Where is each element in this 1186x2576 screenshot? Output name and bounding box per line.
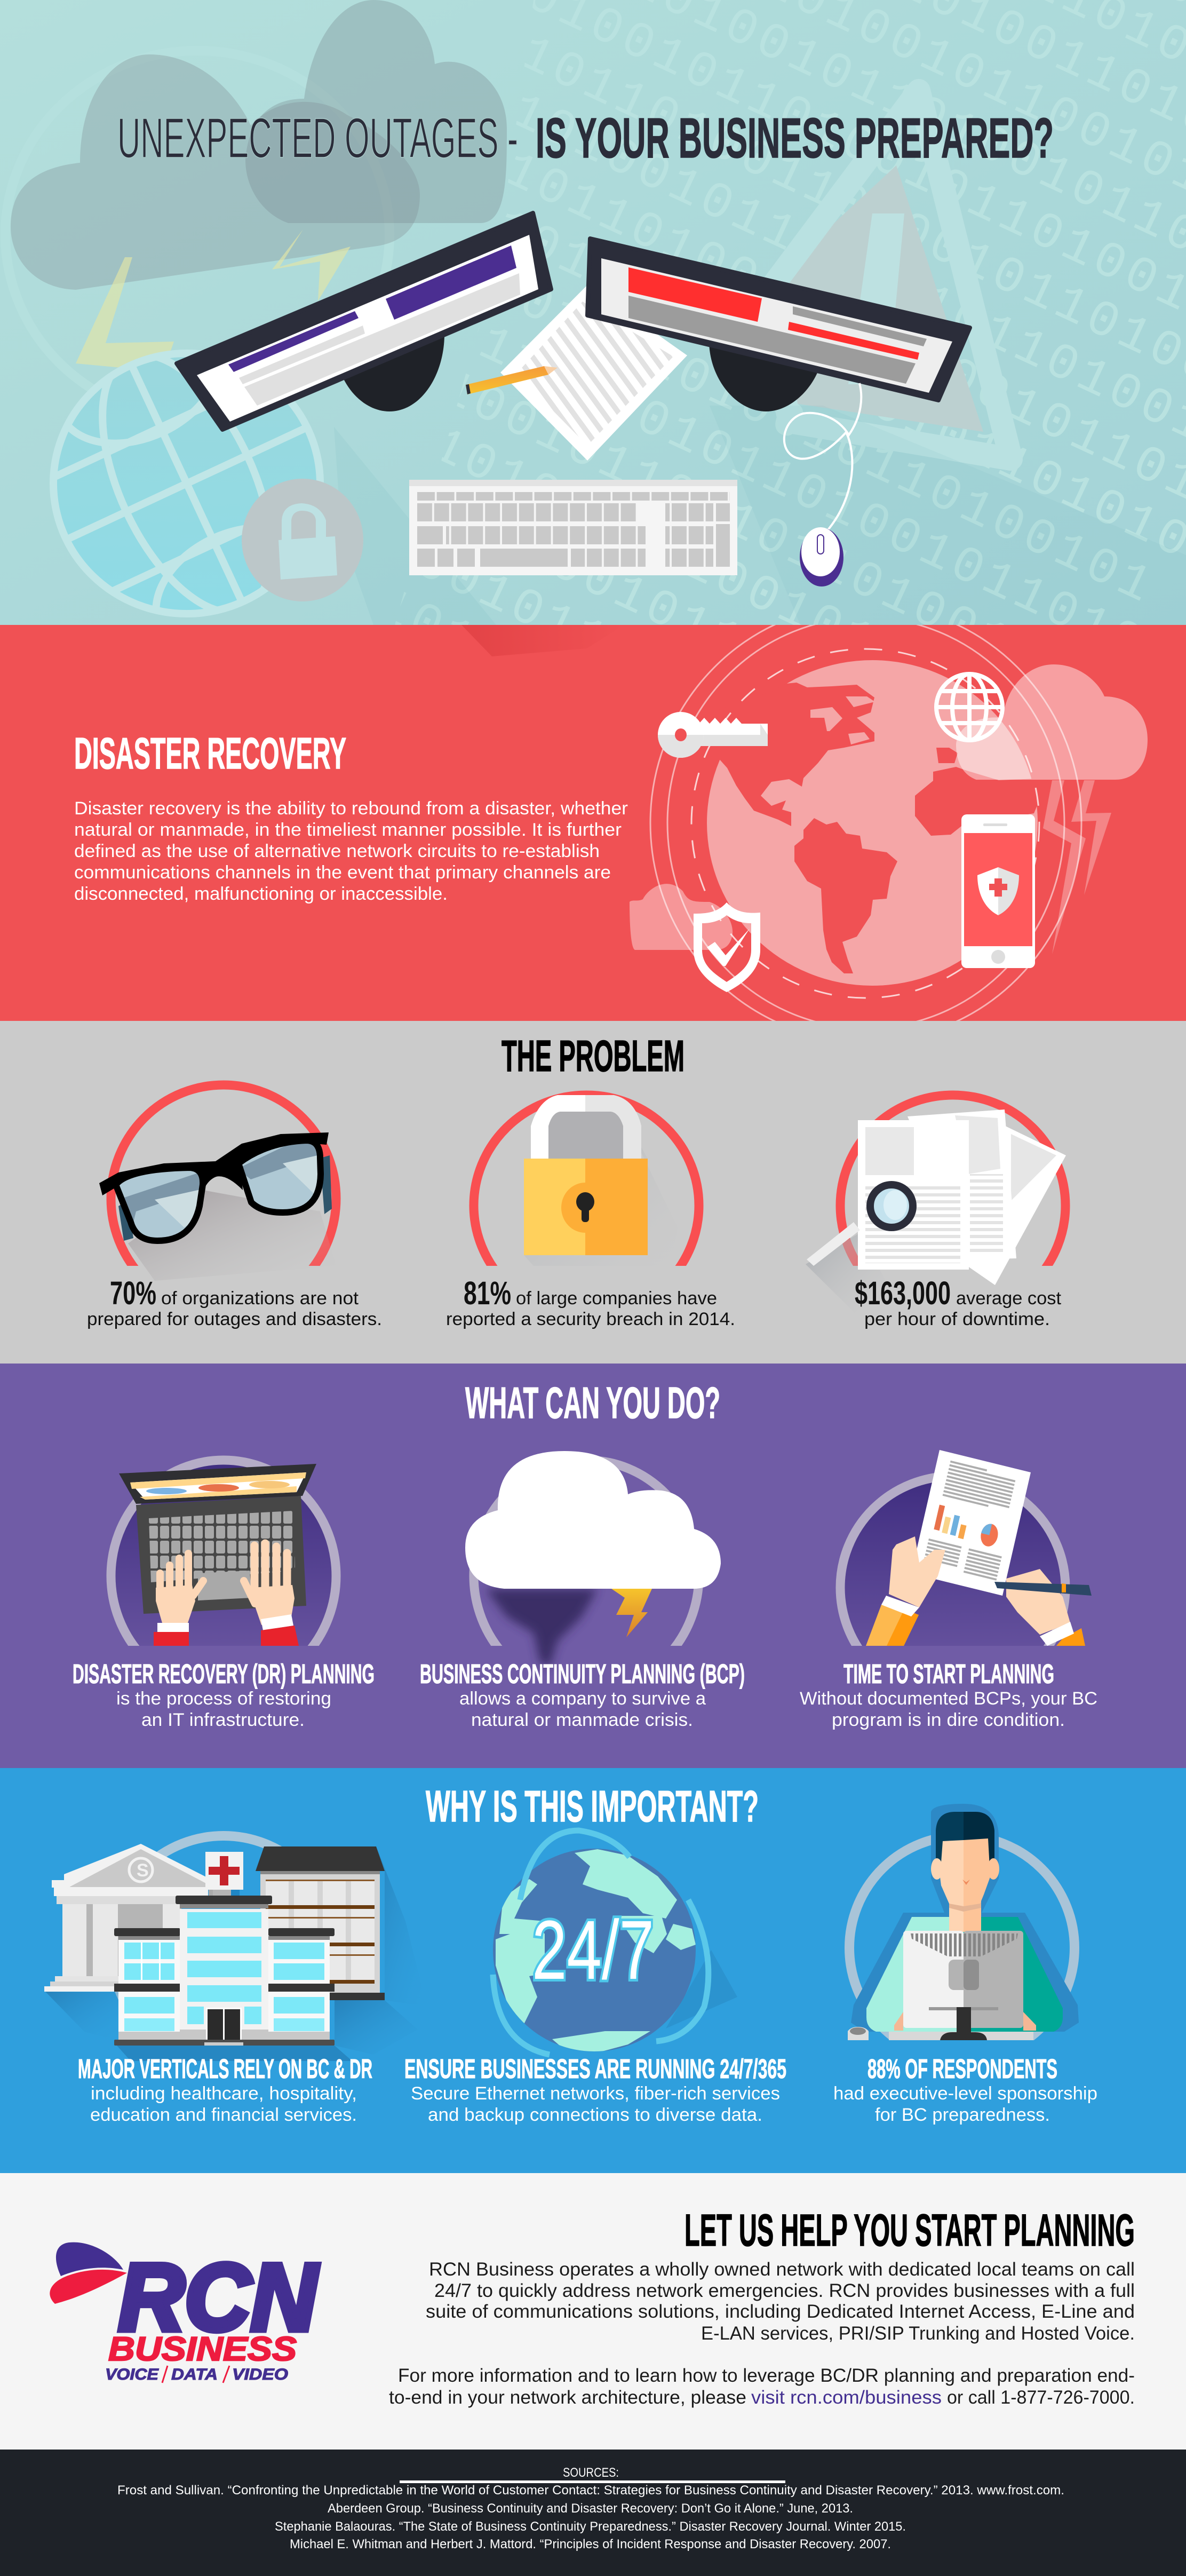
hair — [936, 1812, 964, 1861]
planning document illustration — [840, 1476, 1085, 1699]
item: major verticals: education and financial services. — [90, 2105, 357, 2125]
item: DR planning: an IT infrastructure. — [141, 1710, 305, 1730]
stat: $163,000 — [855, 1275, 1062, 1329]
logo: RCN Business — [50, 2242, 319, 2383]
shield check icon — [694, 902, 760, 992]
hands and pen — [881, 1536, 1092, 1646]
smartphone icon — [961, 814, 1035, 968]
item: time to start — [800, 1659, 1097, 1730]
panel: sources — [0, 2450, 1186, 2576]
company paragraph: 24/7 to quickly address network emergencies. RCN provides businesses with a full — [434, 2280, 1135, 2301]
report page — [911, 1450, 1031, 1596]
stat: $163,000: average cost — [956, 1288, 1062, 1309]
mouse — [800, 527, 843, 586]
logo: RCN Business: RCN — [118, 2244, 319, 2350]
lightning pale — [1043, 780, 1111, 954]
item: BC planning: allows a company to survive a — [459, 1689, 706, 1709]
apartment building — [256, 1846, 385, 2000]
title — [120, 117, 1052, 158]
binary digit background: 1001101001011010010110100101 — [259, 155, 1164, 617]
face — [940, 1840, 964, 1906]
stat: 81% — [446, 1275, 735, 1329]
binary digit background: 0100101101001101001010110100 — [202, 314, 1107, 776]
binary digit background: 1010110100101100101101001101 — [211, 256, 1116, 719]
binary digit background: 0110010110100101101001011010 — [250, 212, 1154, 675]
shirt — [866, 1917, 964, 2032]
body text: Disaster recovery is the ability to rebound from a disaster, whether — [74, 798, 628, 819]
source list: Aberdeen Group. “Business Continuity and Disaster Recovery: Don’t Go it Alone.” June, 2013. — [328, 2501, 853, 2516]
item: ensure businesses — [404, 2054, 786, 2125]
monitor back — [903, 1931, 964, 2028]
24/7 label: 24/7 — [532, 1904, 654, 1997]
shadow at panel top — [461, 625, 624, 656]
ring behind globe — [5, 51, 389, 419]
heading: WHAT CAN YOU DO? — [465, 1378, 720, 1428]
target ring for glasses — [111, 1085, 336, 1312]
logo: RCN Business: VIDEO — [232, 2366, 288, 2383]
right hand — [244, 1543, 294, 1625]
source list: Frost and Sullivan. “Confronting the Unpredictable in the World of Customer Contact: Strategies for Business Continuity and Disaster Recovery.” 2013. www.frost.com. — [117, 2483, 1064, 2498]
logo: RCN Business: BUSINESS — [108, 2331, 297, 2368]
stat: 70%: 70% — [110, 1275, 156, 1311]
item: BC planning: BUSINESS CONTINUITY PLANNING (BCP) — [420, 1659, 745, 1689]
title: UNEXPECTED OUTAGES - — [117, 107, 518, 170]
panel: hero — [0, 0, 1186, 625]
stat: 81%: of large companies have — [516, 1288, 717, 1309]
binary digit background: 1011010010110010110100101001 — [117, 459, 1021, 922]
white cloud — [465, 1451, 721, 1589]
padlock illustration — [474, 1095, 699, 1316]
world map globe — [650, 604, 1081, 1042]
target ring for documents — [840, 1095, 1065, 1316]
monitor stand left — [344, 337, 444, 411]
panel: what can you do — [0, 1364, 1186, 1768]
stat: 81%: reported a security breach in 2014. — [446, 1309, 735, 1329]
logo: RCN Business: DATA — [171, 2366, 218, 2383]
heading: THE PROBLEM — [502, 1031, 684, 1081]
item: ensure businesses: ENSURE BUSINESSES ARE RUNNING 24/7/365 — [404, 2054, 786, 2084]
bank: S — [137, 1860, 149, 1881]
cloud right — [956, 664, 1148, 780]
item: 88% of respondents — [833, 2054, 1097, 2125]
hands — [894, 2012, 903, 2031]
panel: disaster recovery — [0, 604, 1186, 1042]
glasses illustration — [99, 1132, 336, 1281]
item: 88% of respondents: had executive-level sponsorship — [833, 2083, 1097, 2104]
keyboard — [409, 480, 737, 575]
person at monitor illustration — [848, 1804, 1079, 2060]
item: DR planning — [73, 1659, 375, 1730]
buildings illustration — [44, 1836, 427, 2061]
item: major verticals: MAJOR VERTICALS RELY ON BC & DR — [78, 2054, 372, 2084]
outer rings — [650, 604, 1081, 1042]
pencil — [466, 366, 558, 394]
company paragraph: RCN Business operates a wholly owned network with dedicated local teams on call — [429, 2259, 1135, 2280]
item: 88% of respondents: for BC preparedness. — [875, 2105, 1050, 2125]
item: 88% of respondents: 88% OF RESPONDENTS — [867, 2054, 1057, 2084]
stat: 70%: of organizations are not — [161, 1288, 359, 1309]
item: BC planning — [420, 1659, 745, 1730]
heading: WHY IS THIS IMPORTANT? — [426, 1781, 759, 1831]
binary digit background: 0010110100101101001011001011 — [155, 416, 1060, 878]
dark shadow bands — [334, 429, 469, 625]
item: time to start: program is in dire condition. — [832, 1710, 1065, 1730]
item: BC planning: natural or manmade crisis. — [471, 1710, 693, 1730]
contact paragraph — [389, 2365, 1135, 2408]
paper document — [500, 285, 687, 461]
stat: $163,000: $163,000 — [855, 1275, 951, 1311]
contact paragraph: or call 1-877-726-7000. — [947, 2387, 1135, 2408]
lightning bolts — [76, 230, 351, 367]
key icon — [658, 712, 768, 758]
ears — [931, 1858, 943, 1880]
item: major verticals — [78, 2054, 372, 2125]
item: DR planning: is the process of restoring — [116, 1689, 331, 1709]
stat: 70% — [87, 1275, 382, 1329]
panel: call to action — [0, 2173, 1186, 2450]
globe grid icon — [936, 674, 1002, 740]
source list: Stephanie Balaouras. “The State of Business Continuity Preparedness.” Disaster Recovery Journal. Winter 2015. — [275, 2519, 906, 2534]
item: ensure businesses: Secure Ethernet networks, fiber-rich services — [411, 2083, 780, 2104]
documents illustration: $ — [928, 1131, 946, 1168]
cloud top — [245, 0, 507, 223]
monitor left — [177, 213, 551, 430]
body text: defined as the use of alternative network circuits to re-establish — [74, 841, 600, 861]
globe icon — [50, 350, 324, 617]
smoke — [485, 1589, 598, 1668]
magnifier — [807, 1185, 913, 1266]
body text: disconnected, malfunctioning or inaccessible. — [74, 884, 448, 904]
stat: 81%: 81% — [464, 1275, 511, 1311]
cloud left — [11, 54, 420, 290]
bank — [44, 1844, 209, 1992]
body text: communications channels in the event that primary channels are — [74, 862, 611, 883]
contact paragraph: For more information and to learn how to leverage BC/DR planning and preparation end- — [398, 2365, 1135, 2386]
lightning bolt — [611, 1589, 652, 1637]
neck — [949, 1900, 964, 1932]
binary digit background: 0101011010010110100101101010 — [297, 111, 1186, 574]
panel: why is this important — [0, 1768, 1186, 2173]
logo: RCN Business: VOICE — [105, 2366, 159, 2383]
cloud left small — [630, 884, 733, 950]
globe 24/7 illustration — [493, 1830, 737, 2055]
stat: 70%: prepared for outages and disasters. — [87, 1309, 382, 1329]
padlock icon — [242, 479, 363, 601]
contact paragraph: visit rcn.com/business — [751, 2387, 942, 2408]
dashed orbit — [691, 649, 1039, 998]
contact paragraph: to-end in your network architecture, please — [389, 2387, 746, 2408]
company paragraph — [426, 2259, 1135, 2344]
company paragraph: E-LAN services, PRI/SIP Trunking and Hosted Voice. — [701, 2323, 1135, 2344]
item: ensure businesses: and backup connections to diverse data. — [428, 2105, 762, 2125]
item: major verticals: including healthcare, hospitality, — [91, 2083, 357, 2104]
heading: DISASTER RECOVERY — [74, 728, 346, 778]
source list — [117, 2483, 1064, 2551]
monitor right — [587, 239, 970, 400]
body text — [74, 798, 628, 904]
item: time to start: Without documented BCPs, your BC — [800, 1689, 1097, 1709]
binary digit background: 1011001011010010110100101101 — [306, 53, 1186, 516]
source list: Michael E. Whitman and Herbert J. Mattord. “Principles of Incident Response and Disaster Recovery. 2007. — [290, 2537, 891, 2551]
monitor stand right — [710, 347, 817, 411]
item: DR planning: DISASTER RECOVERY (DR) PLANNING — [73, 1659, 375, 1689]
sources heading: SOURCES: — [563, 2466, 619, 2480]
stat: $163,000: per hour of downtime. — [864, 1309, 1050, 1329]
hospital — [114, 1852, 335, 2046]
binary digit background: 1101001011010010110011010010 — [164, 358, 1069, 821]
mouse cable — [784, 383, 861, 531]
company paragraph: suite of communications solutions, including Dedicated Internet Access, E-Line and — [426, 2301, 1135, 2322]
storm cloud illustration — [474, 1460, 699, 1692]
body text: natural or manmade, in the timeliest manner possible. It is further — [74, 820, 622, 840]
warning triangle — [757, 91, 1011, 459]
left hand — [156, 1553, 203, 1623]
panel: the problem — [0, 1021, 1186, 1364]
laptop illustration — [111, 1460, 336, 1692]
documents illustration — [806, 1109, 1066, 1313]
